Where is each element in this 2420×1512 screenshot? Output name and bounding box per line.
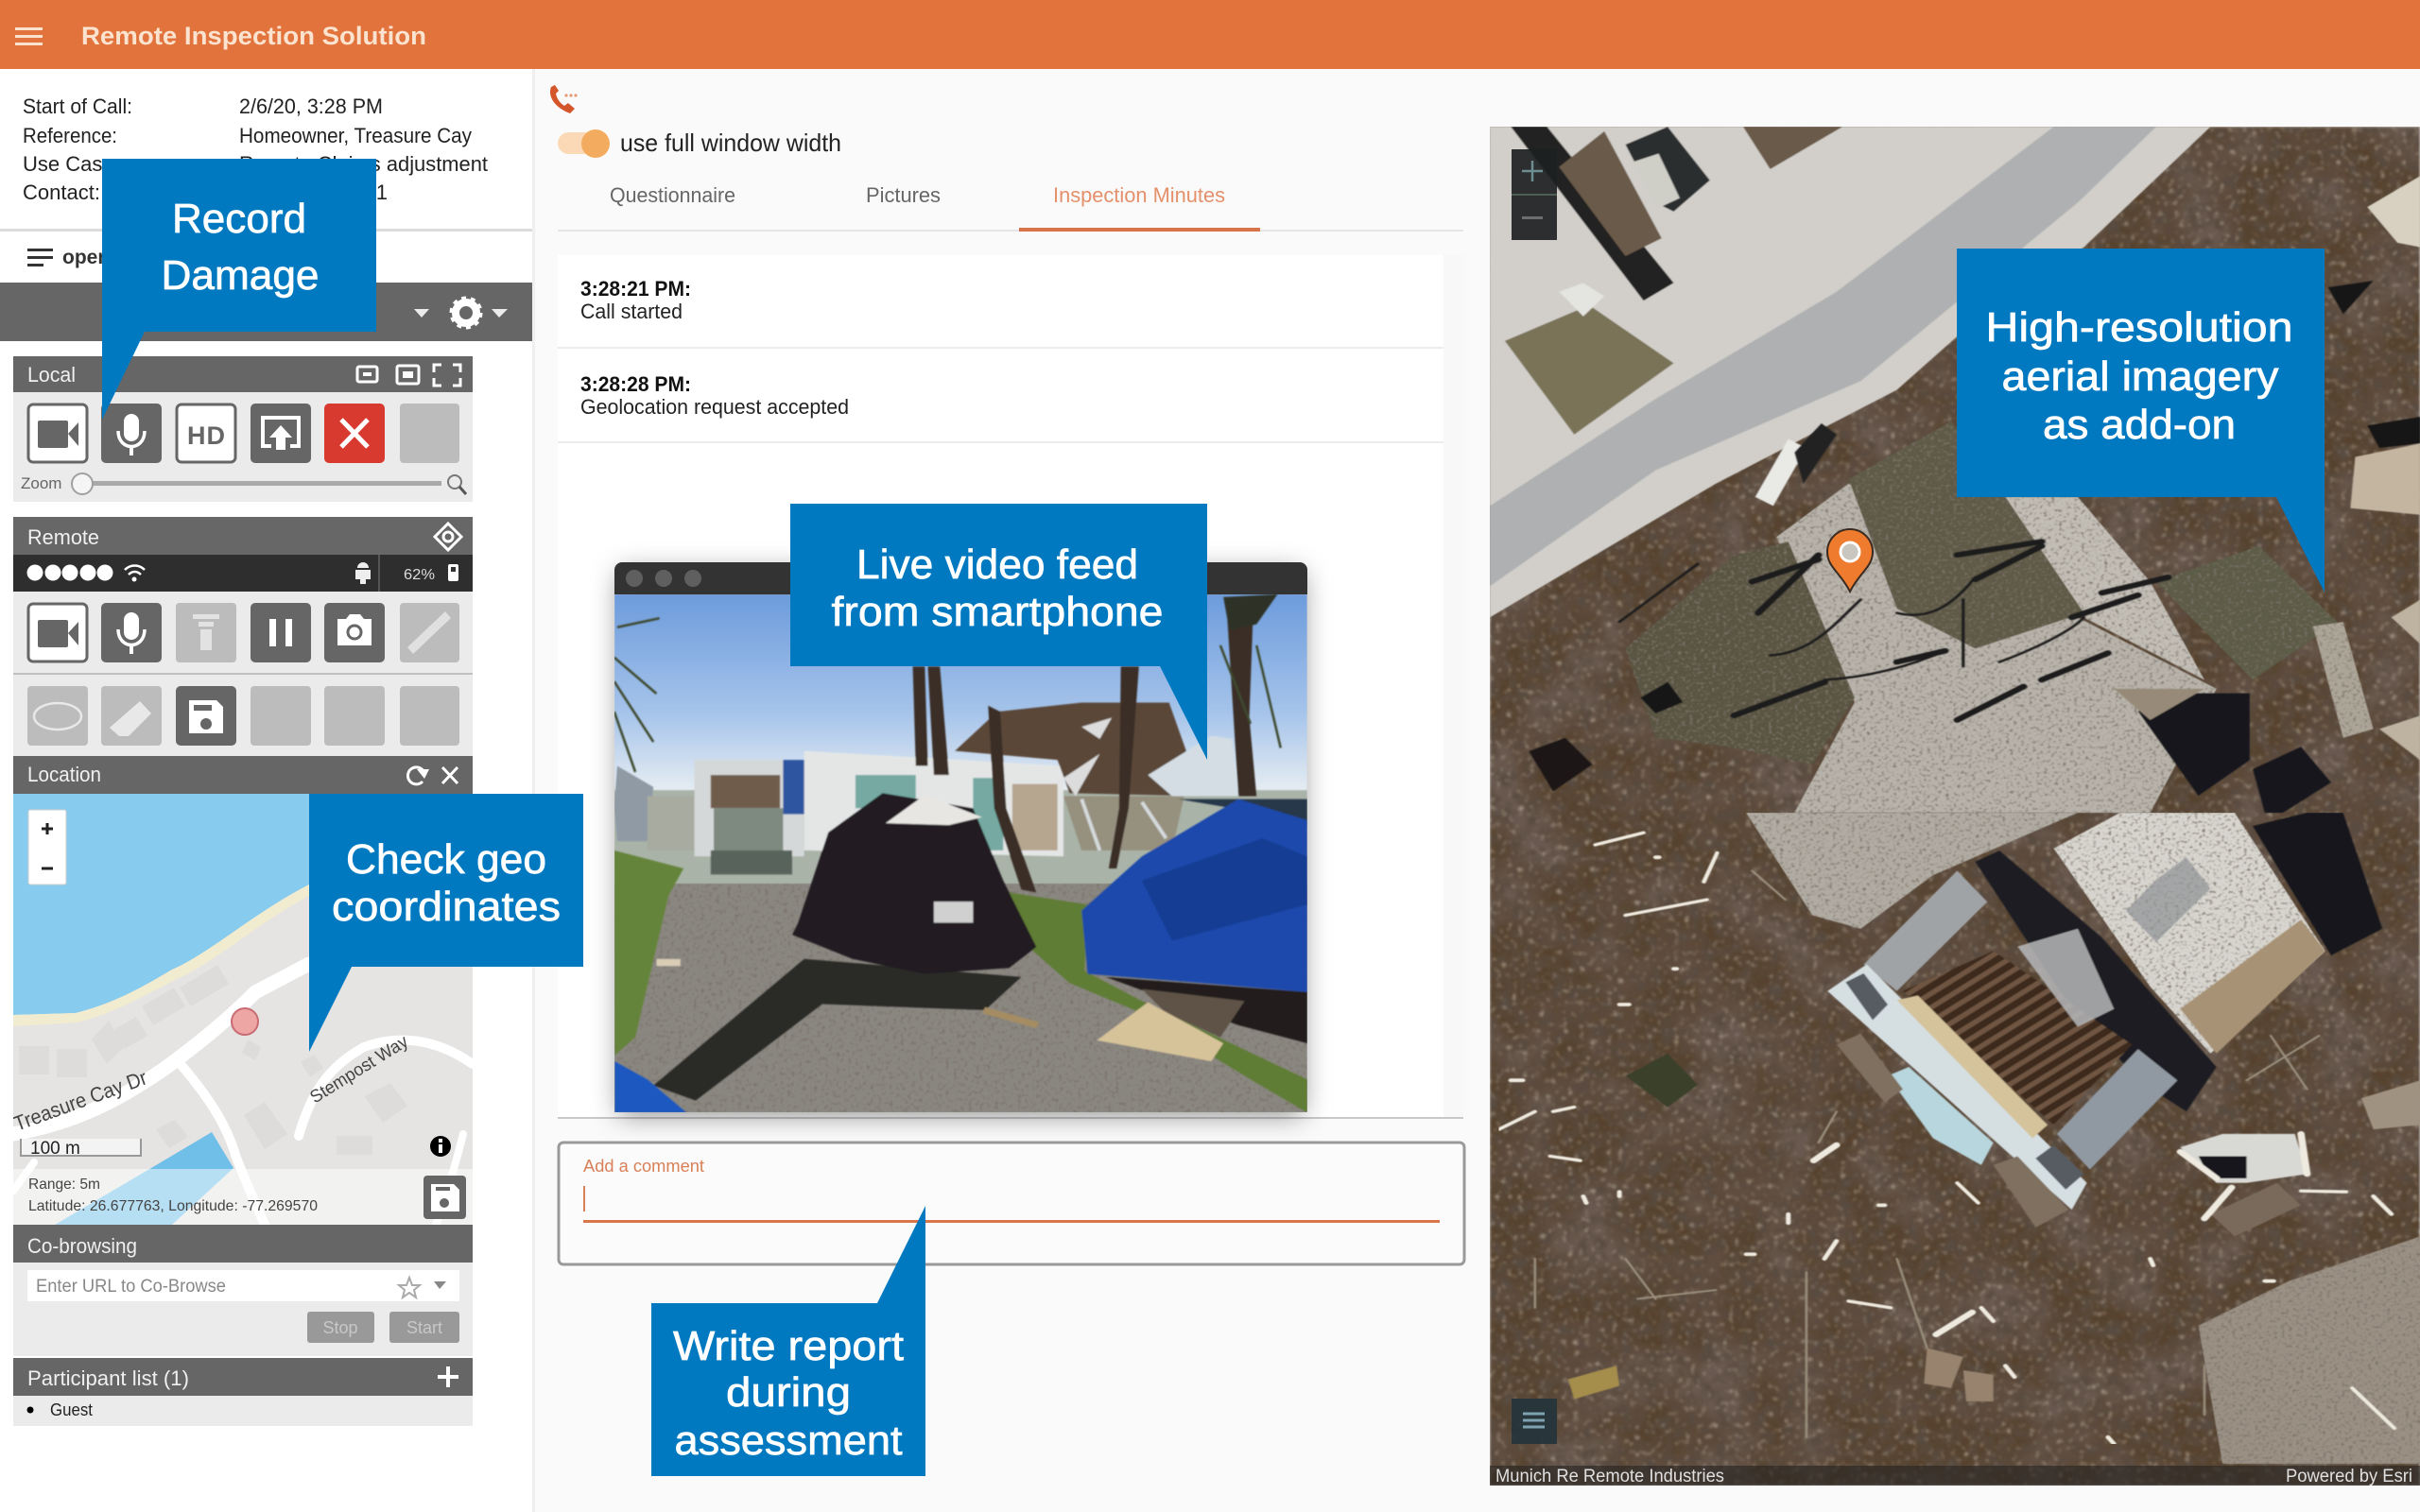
- attribution bar: [1490, 1466, 2420, 1486]
- panel: call information: 2/6/20, 3:28 PM: [239, 94, 383, 118]
- toggle: use full window width: use full window width: [620, 129, 841, 157]
- callout: write report: [651, 1206, 925, 1476]
- callout: write report: assessment: [675, 1418, 902, 1464]
- map menu button: [1512, 1399, 1557, 1444]
- tabs: Pictures: [866, 183, 941, 207]
- callout: high-resolution imagery: High-resolution: [1985, 304, 2293, 351]
- panel: participant list: Guest: [50, 1400, 93, 1419]
- open row: [27, 247, 110, 268]
- tabs: [558, 183, 1463, 232]
- callout: record damage: Damage: [161, 252, 320, 299]
- coordinates overlay: [13, 1169, 473, 1225]
- panel: location: Location: [27, 763, 101, 786]
- palm shadows: [1619, 541, 2169, 720]
- tabs: Questionnaire: [610, 183, 735, 207]
- callout: write report: Write report: [673, 1323, 904, 1369]
- panel: location: [10, 756, 473, 1228]
- neighbouring building: [1511, 127, 1674, 301]
- button row: local: [28, 404, 459, 463]
- truck: [1755, 439, 1806, 506]
- comment box: Add a comment: [583, 1157, 704, 1176]
- toolbar: settings bar: [0, 283, 532, 341]
- callout: high-resolution imagery: aerial imagery: [2002, 353, 2278, 400]
- icon: info: [430, 1136, 451, 1157]
- pin marker: [1827, 529, 1873, 592]
- panel: inspection minutes: 3:28:21 PM:: [580, 277, 691, 301]
- panel: middle inspection column: [550, 85, 1464, 1264]
- map: [10, 794, 473, 1228]
- panel: call information: 01: [365, 180, 388, 204]
- panel: left sidebar: [0, 69, 535, 1512]
- callout: high-resolution imagery: as add-on: [2043, 402, 2236, 448]
- panel: inspection minutes: 3:28:28 PM:: [580, 372, 691, 396]
- callout: check geo coordinates: Check geo: [346, 836, 546, 883]
- map zoom buttons: [1512, 149, 1557, 240]
- panel: call information: Homeowner, Treasure Cay: [239, 124, 472, 147]
- damaged house: [1976, 850, 2217, 1111]
- scale bar: [21, 1139, 141, 1159]
- button row: local: HD: [187, 421, 225, 450]
- panel: local controls: [13, 356, 473, 502]
- zoom slider: [21, 473, 466, 494]
- photo: hurricane damaged house: [614, 594, 1307, 1112]
- tabs: Inspection Minutes: [1053, 183, 1225, 207]
- comment box: [559, 1143, 1464, 1264]
- icon: phone: [550, 85, 578, 113]
- icon: hamburger menu: [15, 27, 43, 45]
- scale bar: 100 m: [30, 1139, 80, 1159]
- panel: inspection minutes: [558, 255, 1463, 1119]
- button row: remote 1: [28, 603, 459, 662]
- callout: record damage: Record: [172, 196, 306, 242]
- panel: co-browsing: Enter URL to Co-Browse: [36, 1277, 226, 1297]
- plant: [1626, 1054, 1698, 1108]
- callout: live video feed: [790, 504, 1207, 760]
- panel: inspection minutes: Geolocation request accepted: [580, 395, 849, 419]
- panel: remote controls: [13, 517, 473, 756]
- device status bar: [13, 555, 473, 592]
- device status bar: 62%: [404, 567, 435, 583]
- title: Remote Inspection Solution: [81, 22, 426, 50]
- button row: remote 2: [27, 686, 459, 746]
- palm trunks: [913, 603, 1256, 893]
- shadow blocks: [2138, 694, 2250, 796]
- road labels: Treasure Cay Dr: [10, 1066, 150, 1136]
- coordinates overlay: Latitude: 26.677763, Longitude: -77.269570: [28, 1198, 318, 1214]
- panel: co-browsing: Stop: [322, 1318, 358, 1337]
- panel: call information: Remote Claims adjustment: [239, 152, 488, 176]
- attribution bar: Powered by Esri: [2286, 1467, 2412, 1486]
- callout: record damage: [102, 159, 376, 420]
- open row: open: [62, 247, 110, 268]
- panel: co-browsing: Co-browsing: [27, 1234, 137, 1258]
- panel: call information: Reference:: [23, 124, 117, 147]
- wooden debris: [1568, 1366, 1619, 1400]
- callout: high-resolution imagery: [1957, 249, 2325, 593]
- concrete patches: [1746, 813, 2420, 1464]
- callout: write report: during: [726, 1369, 851, 1416]
- map zoom control: [28, 810, 66, 885]
- callout: check geo coordinates: coordinates: [332, 884, 561, 930]
- lots: [1626, 421, 2374, 813]
- panel: call information: [0, 69, 532, 232]
- panel: call information: Use Case:: [23, 152, 120, 176]
- aerial imagery map: [1490, 127, 2420, 1486]
- callout: check geo coordinates: [309, 794, 583, 1052]
- panel: call information: Contact:: [23, 180, 100, 204]
- panel: remote controls: Remote: [27, 525, 99, 549]
- panel: call information: Start of Call:: [23, 94, 132, 118]
- video window: [614, 562, 1307, 1115]
- pavement and road: [1490, 127, 2210, 617]
- ground: [614, 884, 1307, 1112]
- map: Stempost Way: [307, 1032, 412, 1108]
- header bar: [0, 0, 2420, 69]
- callout: live video feed: from smartphone: [832, 589, 1163, 635]
- panel: participant list: [13, 1358, 473, 1426]
- coordinates overlay: Range: 5m: [28, 1177, 100, 1193]
- panel: co-browsing: [13, 1225, 473, 1356]
- panel: co-browsing: Start: [406, 1318, 442, 1337]
- panel: local controls: Local: [27, 363, 76, 387]
- tarps and ground: [653, 959, 1021, 1101]
- attribution bar: Munich Re Remote Industries: [1495, 1467, 1724, 1486]
- debris strokes: [1499, 833, 2394, 1444]
- zoom slider: Zoom: [21, 474, 61, 492]
- panel: participant list: Participant list (1): [27, 1366, 189, 1390]
- callout: live video feed: Live video feed: [856, 541, 1138, 588]
- panel: inspection minutes: Call started: [580, 300, 683, 323]
- debris piles at right: [2367, 176, 2420, 248]
